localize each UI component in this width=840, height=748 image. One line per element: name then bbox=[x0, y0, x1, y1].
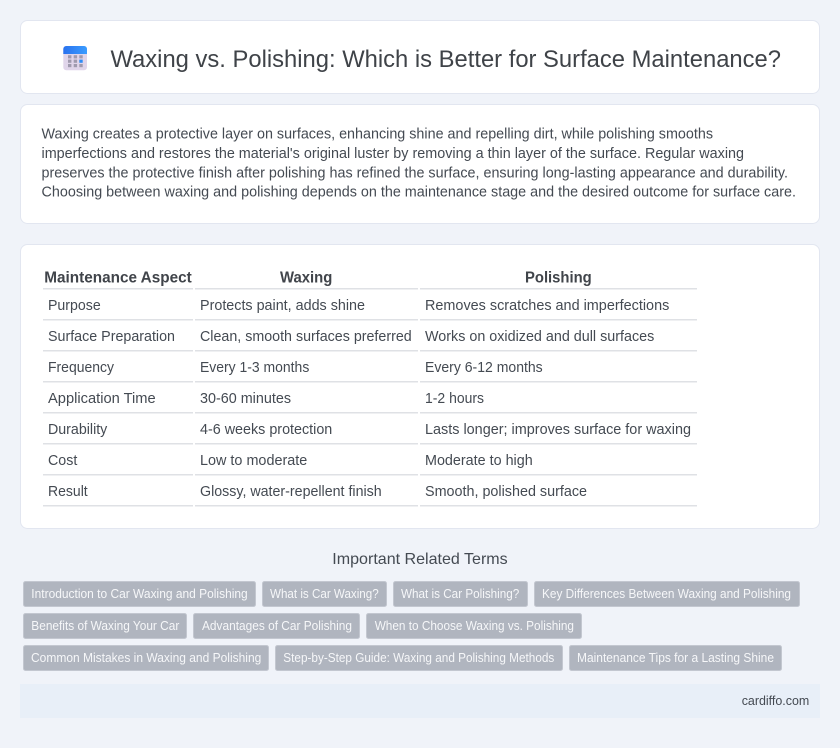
panel: related term tags bbox=[24, 582, 800, 670]
table header row bbox=[43, 270, 697, 289]
tag: advantages of polishing bbox=[194, 614, 360, 638]
table row: Application Time: 1-2 hours bbox=[425, 391, 484, 407]
table row: Result: Smooth, polished surface bbox=[425, 484, 587, 500]
tag: key differences bbox=[534, 582, 800, 606]
table row: Cost: Moderate to high bbox=[425, 453, 533, 469]
table row: Purpose bbox=[43, 298, 697, 320]
table row: Application Time bbox=[43, 391, 697, 413]
text block: introduction bbox=[42, 126, 796, 201]
table row: Durability bbox=[43, 422, 697, 444]
text block: introduction: Waxing creates a protective layer on surfaces, enhancing shine and repelling dirt, while polishing smooths bbox=[42, 126, 713, 142]
tag: step-by-step guide bbox=[276, 646, 562, 670]
table row: Durability: 4-6 weeks protection bbox=[200, 422, 332, 438]
table row: Cost bbox=[43, 453, 697, 475]
text block: introduction: preserves the protective finish after polishing has refined the surface, ensuring long-lasting appearance and durability. bbox=[42, 165, 788, 181]
footer bbox=[20, 684, 820, 718]
tag: step-by-step guide: Step-by-Step Guide: Waxing and Polishing Methods bbox=[283, 651, 554, 665]
table row: Durability: Durability bbox=[48, 422, 108, 438]
table row: Surface Preparation: Surface Preparation bbox=[48, 329, 175, 345]
heading: important related terms: Important Related Terms bbox=[332, 551, 508, 568]
tag: when to choose bbox=[366, 614, 582, 638]
tag: what is car polishing bbox=[394, 582, 528, 606]
table row: Surface Preparation: Works on oxidized and dull surfaces bbox=[425, 329, 654, 345]
panel: comparison table bbox=[20, 244, 820, 528]
table row: Frequency: Frequency bbox=[48, 360, 115, 376]
table row: Application Time: Application Time bbox=[48, 391, 156, 407]
table row: Cost: Low to moderate bbox=[200, 453, 307, 469]
tag: introduction: Introduction to Car Waxing and Polishing bbox=[31, 587, 248, 601]
table row: Result: Result bbox=[48, 484, 88, 500]
table row: Purpose: Purpose bbox=[48, 298, 101, 314]
table row: Surface Preparation bbox=[43, 329, 697, 351]
tag: maintenance tips: Maintenance Tips for a Lasting Shine bbox=[577, 651, 774, 665]
table row: Frequency: Every 1-3 months bbox=[200, 360, 309, 376]
footer: cardiffo.com bbox=[742, 693, 809, 708]
table row: Result bbox=[43, 484, 697, 506]
tag: introduction bbox=[24, 582, 256, 606]
table row: Surface Preparation: Clean, smooth surfaces preferred bbox=[200, 329, 412, 345]
table row: Frequency bbox=[43, 360, 697, 382]
text block: introduction: imperfections and restores the material's original luster by removing a thin layer of the surface. Regular waxing bbox=[42, 146, 744, 162]
tag: what is car polishing: What is Car Polishing? bbox=[401, 587, 519, 601]
title: Waxing vs. Polishing: Which is Better for Surface Maintenance? bbox=[110, 46, 781, 73]
tag: key differences: Key Differences Between Waxing and Polishing bbox=[542, 587, 791, 601]
table row: Purpose: Protects paint, adds shine bbox=[200, 298, 365, 314]
panel: introduction paragraph bbox=[20, 104, 820, 224]
table row: Frequency: Every 6-12 months bbox=[425, 360, 543, 376]
text block: introduction: Choosing between waxing and polishing depends on the maintenance stage and the desired outcome for surface care. bbox=[42, 185, 796, 201]
tag: when to choose: When to Choose Waxing vs. Polishing bbox=[375, 619, 574, 633]
table row: Result: Glossy, water-repellent finish bbox=[200, 484, 382, 500]
tag: what is car waxing: What is Car Waxing? bbox=[270, 587, 379, 601]
panel: title header bbox=[20, 20, 820, 94]
tag: common mistakes bbox=[24, 646, 268, 670]
tag: benefits of waxing: Benefits of Waxing Your Car bbox=[31, 619, 179, 633]
icon: calendar bbox=[63, 46, 87, 70]
table header row: Polishing bbox=[525, 270, 592, 286]
table row: Durability: Lasts longer; improves surface for waxing bbox=[425, 422, 691, 438]
table row: Cost: Cost bbox=[48, 453, 77, 469]
tag: common mistakes: Common Mistakes in Waxing and Polishing bbox=[31, 651, 261, 665]
tag: what is car waxing bbox=[262, 582, 386, 606]
tag: maintenance tips bbox=[570, 646, 782, 670]
tag: benefits of waxing bbox=[24, 614, 186, 638]
table header row: Maintenance Aspect bbox=[44, 270, 192, 286]
table row: Application Time: 30-60 minutes bbox=[200, 391, 291, 407]
table row: Purpose: Removes scratches and imperfections bbox=[425, 298, 669, 314]
table header row: Waxing bbox=[280, 270, 332, 286]
tag: advantages of polishing: Advantages of Car Polishing bbox=[202, 619, 352, 633]
